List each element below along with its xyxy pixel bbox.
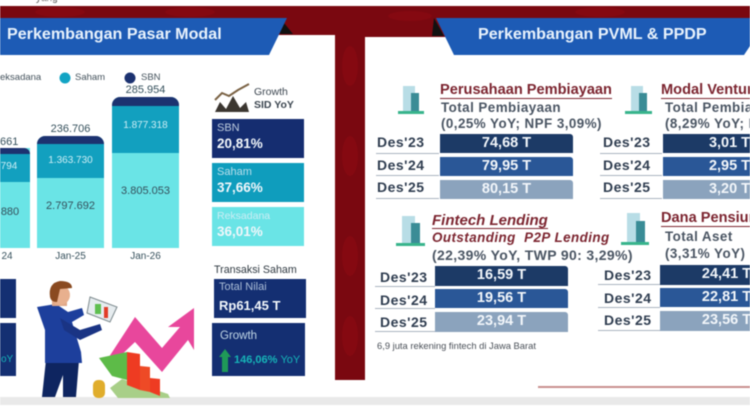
legend: SBN (141, 72, 161, 83)
section: Modal Ventura (600, 82, 750, 200)
card: SBN growth: SBN (217, 122, 240, 134)
card: Saham growth: 37,66% (217, 180, 263, 195)
bar Jan-26: 3.805.053 (121, 185, 170, 197)
card: Total Nilai: Total Nilai (219, 281, 267, 293)
section: Dana Pensiun: 23,56 T (702, 312, 750, 328)
section: Modal Ventura: 3,20 T (709, 181, 750, 197)
section: Dana Pensiun: Des'23 (604, 267, 652, 283)
left partial card with YoY (0, 323, 16, 376)
section: Modal Ventura: Des'24 (603, 157, 651, 173)
subtitle (664, 229, 745, 262)
section: Modal Ventura: Des'25 (603, 179, 651, 195)
stacked bar chart: 661 (0, 136, 18, 148)
section: Fintech Lending: 16,59 T (477, 267, 526, 283)
stacked bar chart (0, 84, 180, 262)
subtitle: Outstanding P2P Lending (432, 230, 610, 245)
icon: growth chart (214, 82, 250, 113)
card: Total Nilai: Rp61,45 T (219, 298, 280, 313)
header: Perkembangan PVML & PPDP: Perkembangan PVML & PPDP (478, 25, 707, 43)
title: Perusahaan Pembiayaan (440, 82, 612, 98)
card: Saham growth: Saham (217, 166, 252, 178)
card: Reksadana growth: 36,01% (217, 224, 263, 239)
card: Reksadana growth: Reksadana (217, 210, 270, 222)
section: Modal Ventura: Des'23 (603, 134, 651, 150)
illustration: businessman with tablet and rising arrow (36, 280, 195, 399)
section: Fintech Lending: Des'24 (380, 292, 428, 308)
card: Total Nilai (214, 279, 306, 318)
bottom gray strip (0, 397, 750, 405)
section: Fintech Lending: Des'25 (380, 314, 428, 330)
section: Perusahaan Pembiayaan: Des'23 (377, 134, 425, 150)
white base below the red column (335, 380, 365, 400)
section: Dana Pensiun: Des'24 (604, 290, 652, 306)
decorative red line (538, 386, 750, 388)
stacked bar chart: 285.954 (126, 84, 165, 96)
bar Jan-24 partial: 794 (1, 161, 17, 172)
bar Jan-26 (112, 97, 179, 248)
subtitle (440, 100, 602, 132)
card: Growth transaksi: 146,06% YoY (234, 354, 300, 366)
card: Saham growth (212, 163, 304, 202)
section: Perusahaan Pembiayaan (376, 82, 613, 200)
card: Growth transaksi (212, 323, 305, 376)
section: Fintech Lending: 19,56 T (477, 290, 526, 306)
axis labels: 24 (1, 251, 13, 262)
bar Jan-25 (37, 136, 104, 248)
section: Fintech Lending: 23,94 T (477, 313, 526, 329)
section: Dana Pensiun: Des'25 (604, 312, 652, 328)
section: Dana Pensiun (598, 210, 750, 332)
bar Jan-26: 1.877.318 (123, 120, 168, 131)
left partial card with YoY: oY (1, 354, 13, 365)
label: Transaksi Saham: Transaksi Saham (214, 264, 297, 276)
panel: left white panel (0, 35, 335, 397)
header: Perkembangan PVML & PPDP (432, 17, 750, 56)
note: fintech accounts: 6,9 juta rekening fintech di Jawa Barat (377, 340, 536, 351)
section: Fintech Lending (374, 212, 633, 352)
section: Perusahaan Pembiayaan: Des'25 (377, 179, 425, 195)
stacked bar chart: Jan-25 (55, 251, 86, 262)
section: Dana Pensiun: 22,81 T (702, 289, 750, 305)
subtitle: Total Pembiayaan (441, 100, 561, 115)
icon: building (397, 86, 425, 115)
section: Modal Ventura: 3,01 T (709, 135, 750, 151)
bar Jan-25: 2.797.692 (46, 200, 95, 212)
panel: right white panel (365, 37, 750, 397)
header: Perkembangan Pasar Modal: Perkembangan Pasar Modal (7, 25, 222, 43)
subtitle: (0,25% YoY; NPF 3,09%) (441, 116, 602, 131)
legend: Saham (75, 72, 105, 83)
subtitle (664, 100, 750, 132)
header: Perkembangan Pasar Modal (0, 17, 294, 56)
section: Perusahaan Pembiayaan: Des'24 (377, 157, 425, 173)
bar Jan-25: 1.363.730 (48, 155, 93, 166)
subtitle: Total Aset (665, 229, 733, 244)
bar Jan-24 partial: 880 (1, 206, 19, 218)
section: Dana Pensiun: 24,41 T (702, 266, 750, 282)
label: Growth SID YoY (254, 86, 294, 111)
subtitle: (3,31% YoY) (665, 246, 745, 261)
section: Perusahaan Pembiayaan: 80,15 T (482, 181, 531, 197)
label: Growth SID YoY: Growth (254, 86, 288, 98)
card: SBN growth: 20,81% (217, 136, 263, 151)
stacked bar chart: 236.706 (51, 123, 90, 135)
section: Fintech Lending: Des'23 (380, 269, 428, 285)
section: Perusahaan Pembiayaan: 74,68 T (482, 135, 531, 151)
bar Jan-24 partial (0, 148, 30, 248)
icon: building (395, 216, 426, 247)
title: Fintech Lending (432, 212, 548, 229)
legend (0, 72, 161, 84)
left partial cards (0, 279, 16, 318)
card: Reksadana growth (212, 207, 304, 246)
section: Modal Ventura: 2,95 T (709, 158, 750, 174)
growth note: (22,39% YoY, TWP 90: 3,29%) (432, 247, 633, 263)
section: Perusahaan Pembiayaan: 79,95 T (482, 158, 531, 174)
label: Growth SID YoY: SID YoY (254, 99, 294, 111)
card: Growth transaksi: Growth (220, 330, 257, 342)
legend: eksadana (0, 72, 41, 83)
icon: building (620, 212, 650, 246)
icon: building (624, 86, 653, 115)
card: SBN growth (212, 119, 304, 158)
stacked bar chart: Jan-26 (130, 251, 161, 262)
